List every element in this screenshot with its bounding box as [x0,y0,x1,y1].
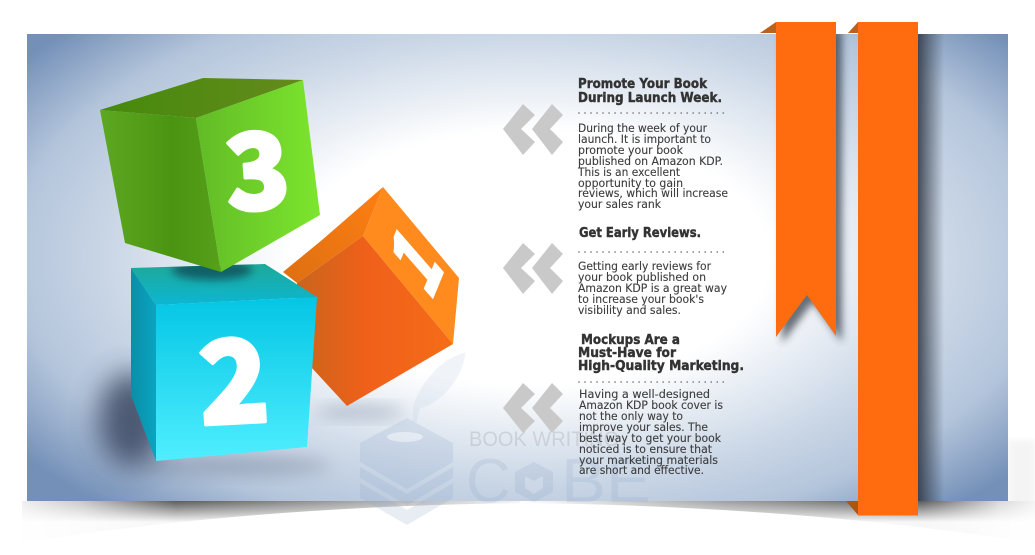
chevrons: step 3 [503,383,563,433]
watermark: brand name: C [466,447,511,516]
body: promote your book: launch. It is important to [578,133,711,146]
heading: promote your book: During Launch Week. [578,90,722,106]
body: get early reviews: to increase your book's [578,293,704,306]
background panel [27,34,1008,501]
chevrons: step 1 [503,104,563,155]
curved shadow beneath panel, right [520,501,1035,543]
body: mockups: Amazon KDP book cover is [579,399,723,412]
watermark: feather [412,353,465,437]
cube 2: blue [131,260,317,461]
heading: mockups [578,332,744,374]
body: mockups: are short and effective. [579,464,704,477]
body: get early reviews: visibility and sales. [578,304,681,317]
body: mockups [579,388,723,477]
heading: get early reviews: Get Early Reviews. [579,225,701,241]
text block: get early reviews [578,225,727,317]
text block: promote your book [577,76,728,211]
heading: mockups: Must-Have for [578,345,676,361]
watermark logo [360,353,651,525]
body: promote your book: This is an excellent [577,166,681,179]
body: mockups: not the only way to [579,410,683,423]
digit 3: 3 [220,86,294,242]
body: mockups: best way to get your book [579,432,721,445]
text block: mockups [578,332,744,477]
heading: promote your book [578,76,722,106]
body: promote your book: opportunity to gain [578,177,683,190]
watermark: brand name: BOOK WRITING [469,428,619,451]
body: promote your book: promote your book [578,144,684,157]
body: get early reviews [578,260,727,317]
cube 1: orange [283,187,463,406]
body: get early reviews: Getting early reviews for [578,260,711,273]
body: get early reviews: your book published on [578,271,706,284]
digit 2: 2 [194,289,273,459]
body: mockups: Having a well-designed [579,388,710,401]
body: promote your book [577,122,728,211]
floor shadow: orange cube [315,405,405,419]
watermark: brand name: BE [561,447,651,516]
shadow vertical fade [0,501,1035,555]
body: promote your book: During the week of your [578,122,707,135]
ribbon shadows [782,30,944,501]
heading: mockups: High-Quality Marketing. [578,358,744,374]
heading: mockups: Mockups Are a [581,332,680,348]
body: promote your book: your sales rank [578,198,662,211]
watermark: book stack [360,418,453,525]
faint side shadow right of panel [1008,440,1035,543]
body: promote your book: reviews, which will increase [578,187,728,200]
body: promote your book: published on Amazon KDP. [578,155,723,168]
floor shadow: blue cube base [140,456,330,476]
heading: promote your book: Promote Your Book [578,76,708,92]
ribbon 1: short bookmark [760,22,836,337]
body: mockups: improve your sales. The [579,421,708,434]
body: get early reviews: Amazon KDP is a great way [578,282,727,295]
chevrons: step 2 [503,243,563,294]
cube 3: green [100,78,320,272]
body: mockups: your marketing materials [579,454,718,467]
ribbon 2: long bookmark [846,22,918,516]
floor shadow: blue cube [98,372,166,468]
watermark: brand name [466,428,651,516]
curved shadow beneath panel, left [22,501,530,543]
digit 1: 1 [362,190,463,324]
shadow of green cube on blue cube [172,260,252,280]
body: mockups: noticed is to ensure that [579,443,713,456]
